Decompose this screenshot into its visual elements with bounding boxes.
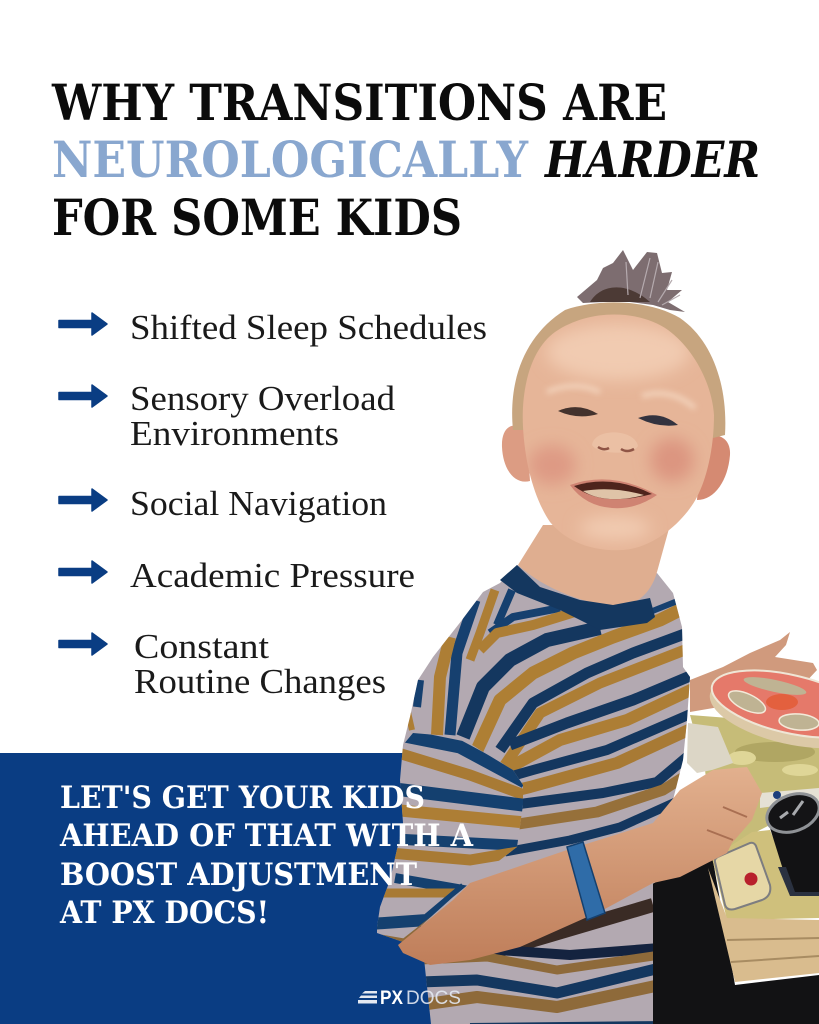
left ear [502,426,530,482]
right eye [638,415,678,426]
left eye [558,407,598,416]
eyebrows [547,386,695,408]
hair [512,302,725,438]
title: NEUROLOGICALLY [52,130,529,189]
item: sensory overload environments: Environments [130,415,339,453]
list of transition challenges [59,309,487,701]
face [523,314,714,550]
item: sensory overload environments [59,380,395,453]
PX Docs logo: PX [380,988,403,1009]
call-to-action text: LET'S GET YOUR KIDS [60,780,425,816]
red button [744,872,758,886]
item: academic pressure: Academic Pressure [130,557,415,595]
title: HARDER [543,130,760,189]
item: constant routine changes: Constant [134,628,269,666]
finger creases [707,807,747,840]
photo: smiling boy at toy console [370,250,819,1024]
right ear [697,435,730,500]
call-to-action text: AT PX DOCS! [59,895,269,931]
PX Docs logo [358,988,461,1009]
item: constant routine changes [59,628,386,701]
far hand [690,632,817,712]
shirt torso and stripes [395,560,695,1024]
toy console [687,715,819,982]
item: sensory overload environments: Sensory Overload [130,380,395,418]
wristband [567,842,605,920]
nose [592,432,638,453]
call-to-action text: AHEAD OF THAT WITH A [59,818,474,854]
PX Docs logo: DOCS [406,988,461,1009]
shirt sleeve [377,733,523,942]
dark table [650,855,819,1024]
console wood front [708,868,819,982]
smile [570,479,657,508]
neck [518,525,670,606]
title: WHY TRANSITIONS ARE [51,73,667,132]
shirt collar [500,565,655,630]
item: social navigation: Social Navigation [130,485,387,523]
title: FOR SOME KIDS [52,188,462,247]
call-to-action text: BOOST ADJUSTMENT [60,857,417,893]
call-to-action text [59,780,474,931]
hair spikes [577,250,685,312]
toy steering wheel [703,658,819,762]
console top surface [712,830,819,920]
white card [687,723,733,773]
joystick [761,787,819,896]
pale button panel [715,843,770,910]
title [51,73,760,247]
item: constant routine changes: Routine Changes [134,663,386,701]
blue call-to-action panel [0,753,431,1024]
item: shifted sleep schedules: Shifted Sleep Schedules [130,309,487,347]
arm and hand [398,767,762,965]
